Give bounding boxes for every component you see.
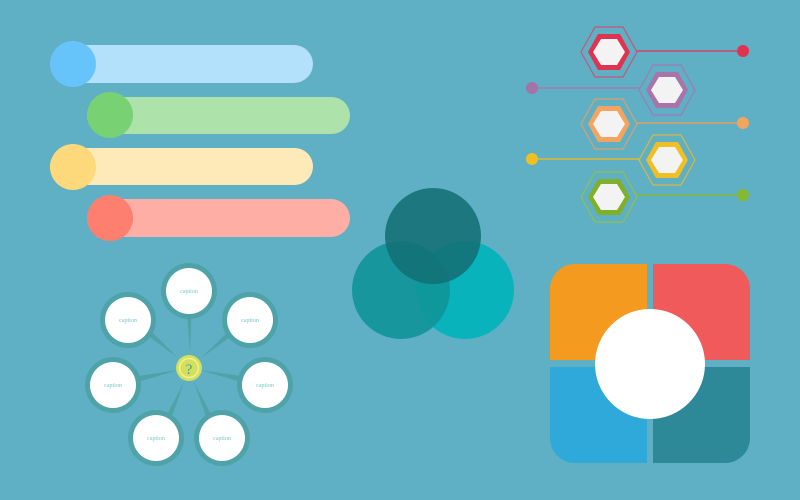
panel: caption bubbles: caption xyxy=(256,383,274,389)
venn diagram xyxy=(352,188,514,339)
panel: caption bubbles: caption xyxy=(147,436,165,442)
panel: four quadrants xyxy=(550,264,750,463)
bubbles xyxy=(85,263,293,466)
hex item: red xyxy=(581,27,749,77)
hex item: orange xyxy=(581,99,749,149)
panel: caption bubbles: caption xyxy=(119,318,137,324)
icon: question mark xyxy=(176,355,202,381)
icon: question mark: ? xyxy=(186,362,193,378)
panel: caption bubbles: caption xyxy=(104,383,122,389)
bar: red xyxy=(87,195,350,241)
panel: caption bubbles: caption xyxy=(241,318,259,324)
bar: green xyxy=(87,92,350,138)
hex item: purple xyxy=(526,65,695,115)
hex item: yellow xyxy=(526,135,695,185)
panel: hexagon timeline xyxy=(526,27,749,222)
bar: yellow xyxy=(50,144,313,190)
panel: caption bubbles xyxy=(85,263,293,466)
panel: caption bubbles: caption xyxy=(180,289,198,295)
hex item: green xyxy=(581,172,749,222)
panel: caption bubbles: caption xyxy=(213,436,231,442)
connectors xyxy=(138,300,241,428)
panel: progress bars xyxy=(50,41,350,241)
bar: blue xyxy=(50,41,313,87)
center circle xyxy=(595,309,705,419)
